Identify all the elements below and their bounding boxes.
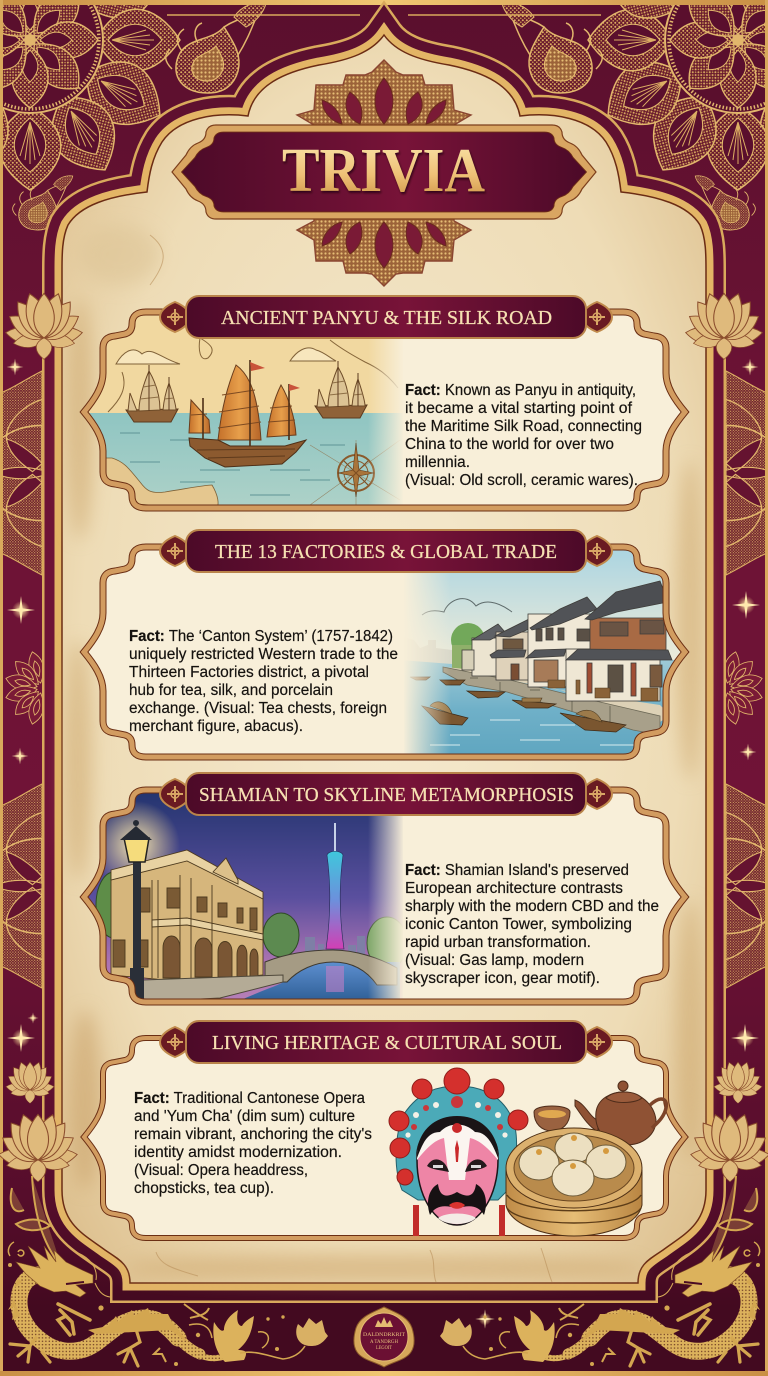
seal emblem: A TANDRGH <box>370 1340 398 1345</box>
lotus small lower right <box>713 1060 763 1103</box>
lotus upper right <box>684 291 764 359</box>
top border lines <box>167 14 601 16</box>
icon: tea cup <box>534 1106 570 1131</box>
central mandala behind title <box>297 60 471 286</box>
text: fact 3: (Visual: Gas lamp, modern <box>405 952 584 969</box>
seal emblem: LEGOIT <box>376 1346 392 1351</box>
sparkle stars <box>7 359 760 1329</box>
side mandala upper right <box>726 371 768 575</box>
banner: shamian <box>160 773 612 815</box>
text: fact 1: the Maritime Silk Road, connecting <box>405 418 642 435</box>
small flower right <box>721 650 764 726</box>
parchment stains <box>64 225 704 1282</box>
seal emblem: DALDNDRKRIT <box>363 1333 405 1338</box>
text: fact 2: hub for tea, silk, and porcelain <box>129 682 333 699</box>
text: fact 2: exchange. (Visual: Tea chests, foreign <box>129 700 387 717</box>
icon: gas lamp <box>120 820 152 1002</box>
illustration: shamian and canton tower <box>88 794 402 998</box>
panel: shamian <box>84 773 685 1010</box>
text: fact 1: it became a vital starting point of <box>405 400 633 417</box>
text: fact 2: Thirteen Factories district, a pivotal <box>129 664 369 681</box>
illustration: junk ships on sea map <box>88 316 402 504</box>
text: fact 1: Fact: Known as Panyu in antiquity, <box>405 382 636 399</box>
text: fact 1: (Visual: Old scroll, ceramic wares). <box>405 472 638 489</box>
icon: main junk ship <box>189 360 306 467</box>
panel: living heritage <box>84 1021 685 1238</box>
banner: living heritage <box>160 1021 612 1063</box>
colonial building <box>111 850 263 982</box>
lotus small lower left <box>5 1060 55 1103</box>
bottom gold strip <box>0 1371 768 1376</box>
text: fact 3 <box>405 862 659 987</box>
banner: ancient panyu: ANCIENT PANYU & THE SILK ROAD <box>221 307 552 329</box>
icon: dim sum steamer <box>506 1128 642 1236</box>
paisley right <box>502 3 602 93</box>
text: fact 1: millennia. <box>405 454 470 471</box>
text: fact 4 <box>134 1090 372 1197</box>
text: fact 4: Fact: Traditional Cantonese Opera <box>134 1090 365 1107</box>
arch frame <box>62 35 706 1283</box>
icon: teapot <box>575 1081 666 1145</box>
lower paisley left <box>13 176 73 230</box>
text: fact 3: rapid urban transformation. <box>405 934 591 951</box>
icon: compass rose <box>338 443 374 497</box>
corner mandala right <box>588 0 768 190</box>
text: fact 3: sharply with the modern CBD and the <box>405 898 659 915</box>
title banner <box>172 125 596 219</box>
lotus upper left <box>4 291 84 359</box>
buildings <box>462 581 672 701</box>
parchment cracks <box>150 235 552 1282</box>
text: fact 3: European architecture contrasts <box>405 880 623 897</box>
title: TRIVIA <box>282 137 485 205</box>
scrollwork lower right <box>706 1176 757 1268</box>
corner mandala left <box>0 0 180 190</box>
bridge <box>265 950 397 985</box>
text: fact 3: skyscraper icon, gear motif). <box>405 970 600 987</box>
banner: 13 factories: THE 13 FACTORIES & GLOBAL TRADE <box>215 541 557 563</box>
text: fact 4: and 'Yum Cha' (dim sum) culture <box>134 1108 355 1125</box>
side mandala lower right <box>726 784 768 988</box>
scrollwork lower left <box>11 1176 62 1268</box>
dragon left <box>8 1242 328 1366</box>
icon: opera mask with headdress <box>389 1068 528 1236</box>
text: fact 2: merchant figure, abacus). <box>129 718 303 735</box>
text: fact 1 <box>405 382 642 489</box>
left gold strip <box>0 0 3 1376</box>
lotus large lower left <box>0 1112 78 1182</box>
text: fact 3: Fact: Shamian Island's preserved <box>405 862 629 879</box>
text: fact 2 <box>129 628 398 735</box>
paisley left <box>166 3 266 93</box>
dragon right <box>440 1242 760 1366</box>
text: fact 2: Fact: The ‘Canton System’ (1757-1842) <box>129 628 393 645</box>
small flower left <box>4 650 47 726</box>
top gold strip <box>0 0 768 5</box>
banner: living heritage: LIVING HERITAGE & CULTURAL SOUL <box>212 1032 562 1054</box>
text: fact 4: chopsticks, tea cup). <box>134 1180 274 1197</box>
side mandala upper left <box>0 371 42 575</box>
text: fact 1: China to the world for over two <box>405 436 614 453</box>
banner: shamian: SHAMIAN TO SKYLINE METAMORPHOSIS <box>199 784 574 806</box>
text: fact 4: (Visual: Opera headdress, <box>134 1162 308 1179</box>
quay walkway and wall <box>443 667 670 722</box>
panel: ancient panyu <box>84 296 685 510</box>
lower paisley right <box>695 176 755 230</box>
panel: 13 factories <box>84 530 690 760</box>
seal emblem <box>354 1307 414 1367</box>
text: fact 3: iconic Canton Tower, symbolizing <box>405 916 632 933</box>
illustration: river factories <box>406 550 680 754</box>
side mandala lower left <box>0 784 42 988</box>
text: fact 2: uniquely restricted Western trade to the <box>129 646 398 663</box>
lotus large lower right <box>690 1112 768 1182</box>
water under bridge <box>244 962 400 998</box>
banner: ancient panyu <box>160 296 612 338</box>
boats <box>410 677 626 732</box>
right gold strip <box>765 0 768 1376</box>
text: fact 4: identity amidst modernization. <box>134 1144 342 1161</box>
text: fact 4: remain vibrant, anchoring the city's <box>134 1126 372 1143</box>
canton tower <box>326 823 344 949</box>
banner: 13 factories <box>160 530 612 572</box>
